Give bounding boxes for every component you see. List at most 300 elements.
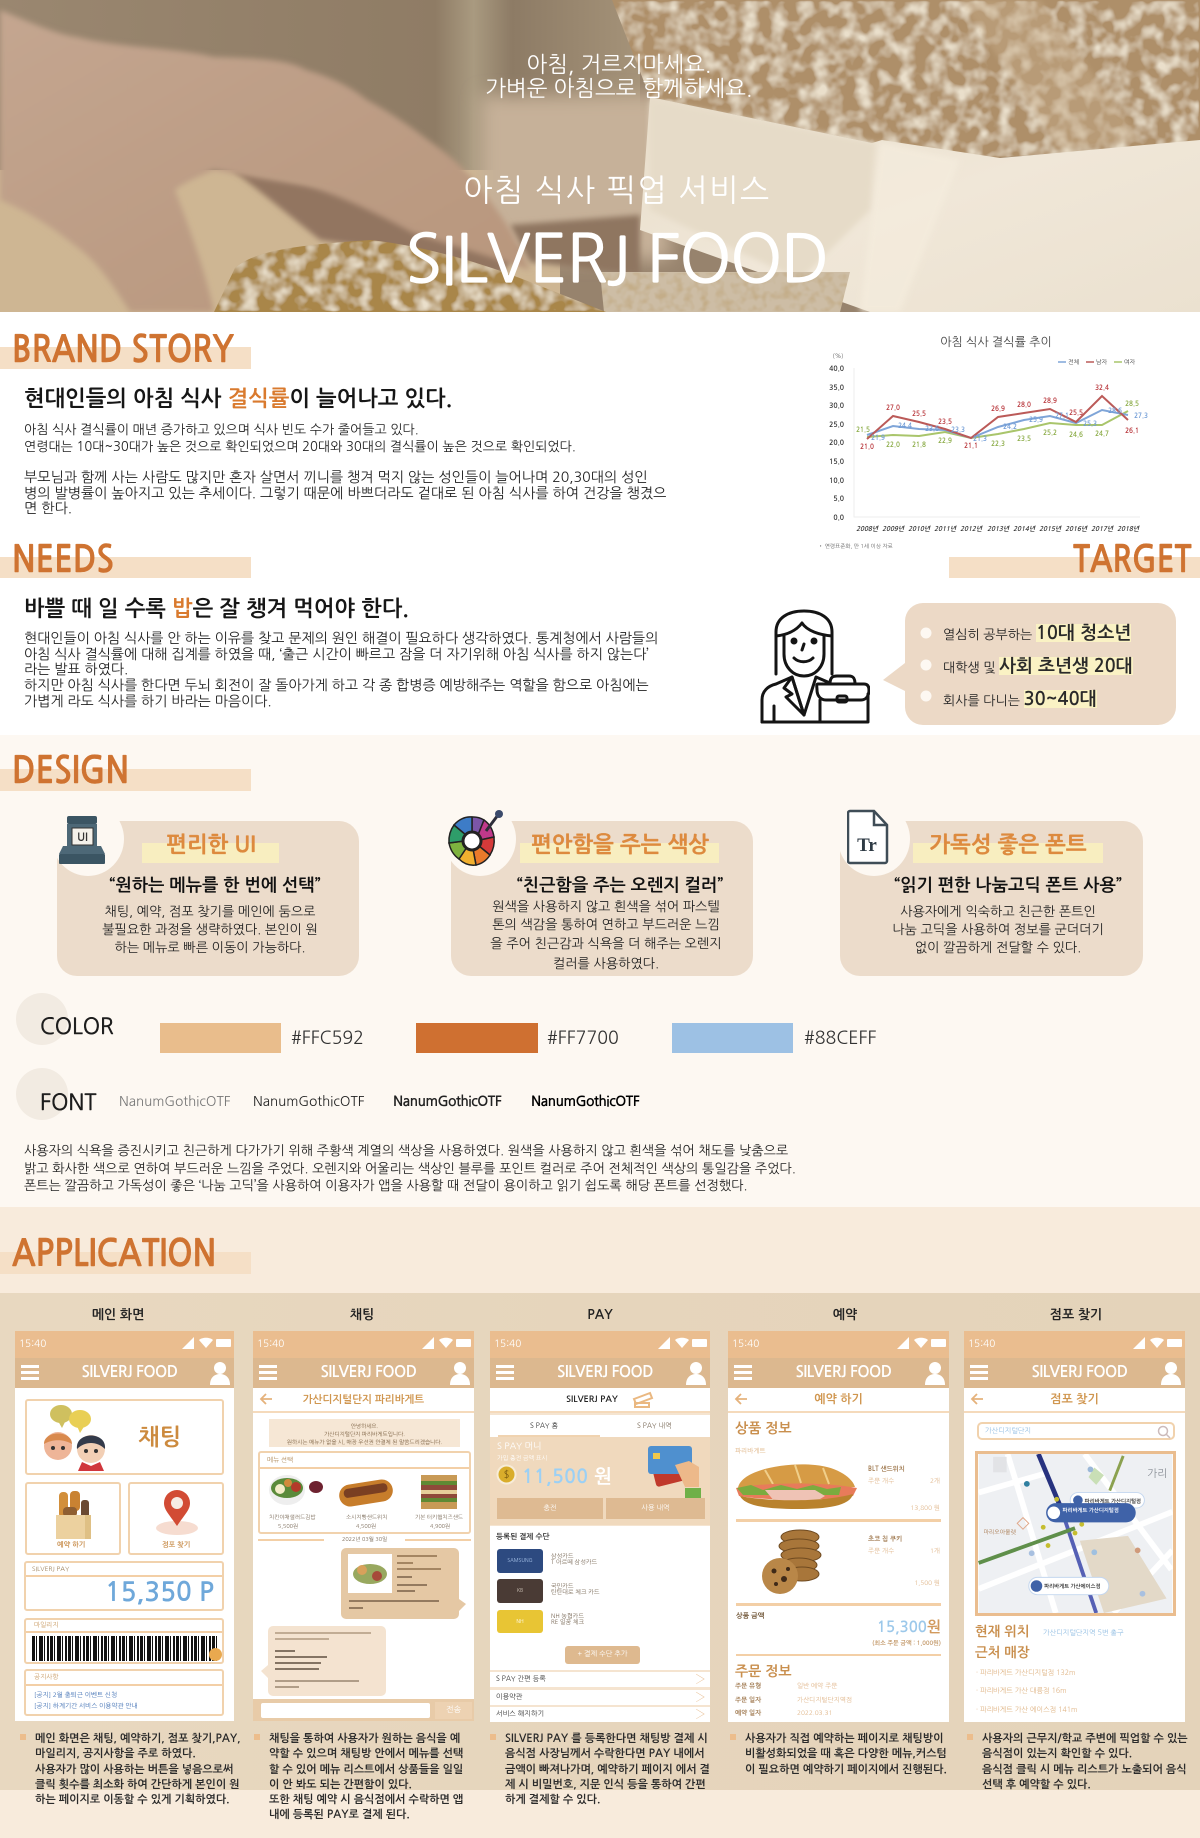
- illustration: chat people: [44, 1405, 106, 1471]
- reservation header: [728, 1388, 949, 1413]
- caption: pay: 하게 결제할 수 있다.: [505, 1794, 600, 1805]
- order info rows: 주문 일자: [735, 1697, 761, 1703]
- nearby stores: · 파리바게트 가산 에이스점 141m: [976, 1707, 1077, 1714]
- caption: chat: 약할 수 있으며 채팅방 안에서 메뉴를 선택: [269, 1748, 463, 1759]
- card description: 나눔 고딕을 사용하여 정보를 군더더기: [892, 923, 1104, 936]
- target item: teens: 열심히 공부하는 10대 청소년: [943, 624, 1131, 642]
- chart: breakfast skip rate trend: 23.6: [925, 426, 939, 432]
- screen label: reservation: 예약: [833, 1308, 857, 1321]
- chat notice: 안녕하세요.: [351, 1423, 378, 1429]
- card description: 톤의 색감을 통하여 연하고 부드러운 느낌: [492, 918, 720, 931]
- caption: pay: SILVERJ PAY 를 등록한다면 채팅방 결제 시: [505, 1733, 708, 1744]
- pay tabs: S PAY 내역: [637, 1423, 672, 1430]
- card description: 채팅, 예약, 점포 찾기를 메인에 둠으로: [105, 905, 315, 918]
- payment methods title: 등록된 결제 수단: [496, 1534, 550, 1541]
- font sample: regular: NanumGothicOTF: [253, 1095, 364, 1108]
- chart: breakfast skip rate trend: 21.8: [912, 442, 926, 448]
- food: sub sandwich: [735, 1462, 858, 1510]
- card corner circle: [52, 802, 124, 876]
- caption: pay: 제 시 비밀번호, 지문 인식 등을 통하여 간편: [505, 1779, 706, 1790]
- app nav bar: [964, 1358, 1185, 1388]
- pay balance: 11,500 원: [522, 1467, 613, 1486]
- brand story second paragraph: [24, 470, 666, 516]
- needs subheading: 바쁠 때 일 수록 밥은 잘 챙겨 먹어야 한다.: [24, 599, 409, 620]
- card description: 원색을 사용하지 않고 흰색을 섞어 파스텔: [492, 900, 720, 913]
- chart: breakfast skip rate trend: 40.0: [829, 366, 844, 373]
- swatch label: #FF7700: [547, 1029, 619, 1047]
- chart: breakfast skip rate trend: 0.0: [833, 515, 844, 522]
- swatch label: #88CEFF: [804, 1029, 876, 1047]
- chat input bar: [253, 1699, 474, 1721]
- chart: breakfast skip rate trend: 남자: [1096, 359, 1108, 365]
- divider: [736, 1654, 941, 1656]
- chart: breakfast skip rate trend: 23.5: [938, 419, 952, 425]
- chart: breakfast skip rate trend: 전체: [1068, 359, 1080, 365]
- brand story second paragraph: 병의 발병률이 높아지고 있는 추세이다. 그렇기 때문에 바쁘더라도 겉대로 된 아침 식사를 하여 건강을 챙겼으: [24, 486, 666, 500]
- chat input bar: 전송: [446, 1706, 461, 1714]
- product total: (최소 주문 금액 : 1,000원): [872, 1640, 941, 1646]
- menu list: 4,500원: [356, 1523, 376, 1529]
- card background: [57, 821, 359, 976]
- screen label: chat: 채팅: [350, 1308, 374, 1321]
- menu list: 4,900원: [430, 1523, 450, 1529]
- section: design: [0, 735, 1200, 1207]
- store finder header: [964, 1388, 1185, 1413]
- caption: main: 마일리지, 공지사항을 주로 하였다.: [35, 1748, 196, 1759]
- chart: breakfast skip rate trend: 21.0: [860, 444, 874, 450]
- needs body text: 하지만 아침 식사를 한다면 두뇌 회전이 잘 돌아가게 하고 각 종 합병증 예방해주는 역할을 함으로 아침에는: [24, 679, 649, 693]
- item detail: cookies: 1,500 원: [914, 1579, 940, 1586]
- app nav bar: [15, 1358, 234, 1388]
- chat header: 가산디지털단지 파리바게트: [303, 1394, 424, 1405]
- card description: [892, 905, 1104, 954]
- chart: breakfast skip rate trend: • 연령표준화, 만 1세 이상 자료: [818, 543, 893, 549]
- chart: breakfast skip rate trend: 25.5: [1069, 410, 1083, 416]
- item detail: cookies: 주문 개수: [868, 1547, 894, 1554]
- icon: font file: [847, 810, 888, 864]
- chart: breakfast skip rate trend: 27.3: [1134, 413, 1148, 419]
- icon: font file: Tr: [857, 835, 877, 856]
- order info rows: 2022.03.31: [797, 1709, 832, 1716]
- chart: breakfast skip rate trend: 21.9: [871, 435, 885, 441]
- caption bullet: [967, 1734, 973, 1740]
- caption bullet: [490, 1734, 496, 1740]
- chart: breakfast skip rate trend: [818, 336, 1148, 549]
- chat bubble: order: [341, 1548, 466, 1619]
- card: samsung: SAMSUNG: [507, 1558, 533, 1563]
- font sample: light: NanumGothicOTF: [119, 1095, 230, 1108]
- target item: thirties and forties: 회사를 다니는 30~40대: [943, 690, 1097, 708]
- chart: breakfast skip rate trend: 24.7: [1095, 431, 1109, 437]
- card description: 사용자에게 익숙하고 친근한 폰트인: [900, 905, 1096, 918]
- chart: breakfast skip rate trend: 2015년: [1039, 525, 1062, 532]
- map: 파리바게트 가산디지털점: [1085, 1498, 1141, 1504]
- food: hotdog: [339, 1480, 393, 1506]
- row: terms: ›: [695, 1691, 706, 1703]
- icon: woman with briefcase: [760, 610, 870, 724]
- phone: main screen: [15, 1331, 234, 1721]
- app nav bar: SILVERJ FOOD: [795, 1365, 892, 1380]
- food: cookies: [762, 1529, 822, 1595]
- card title highlight: [913, 843, 1103, 863]
- caption: chat: 채팅을 통하여 사용자가 원하는 음식을 예: [269, 1733, 460, 1744]
- chart: breakfast skip rate trend: 2017년: [1091, 525, 1114, 532]
- design rationale text: [24, 1144, 796, 1192]
- chart: breakfast skip rate trend: 2016년: [1065, 525, 1088, 532]
- caption bullet: [730, 1734, 736, 1740]
- map: 가리: [1147, 1468, 1167, 1479]
- chart: breakfast skip rate trend: 22.3: [991, 441, 1005, 447]
- status bar: [253, 1331, 474, 1358]
- item detail: sandwich: BLT 샌드위치: [868, 1466, 905, 1472]
- icon: coin: [496, 1464, 516, 1484]
- swatch: blue: [672, 1023, 793, 1053]
- nearby stores: [975, 1647, 1180, 1719]
- brand story second paragraph: 부모님과 함께 사는 사람도 많지만 혼자 살면서 끼니를 챙겨 먹지 않는 성인들이 늘어나며 20,30대의 성인: [24, 471, 648, 485]
- font sample: bold: NanumGothicOTF: [393, 1095, 501, 1109]
- status bar: 15:40: [494, 1339, 521, 1349]
- chart: breakfast skip rate trend: 25.0: [829, 422, 844, 429]
- brand story body text: [24, 423, 576, 452]
- card quote: “원하는 메뉴를 한 번에 선택”: [109, 876, 321, 894]
- menu list: 5,500원: [278, 1523, 298, 1529]
- phone: reservation screen: [728, 1331, 949, 1722]
- payment methods: NH 농협카드: [551, 1613, 584, 1619]
- chart: breakfast skip rate trend: 30.0: [829, 403, 844, 410]
- caption: main: 클릭 횟수를 최소화 하여 간단하게 본인이 원: [35, 1779, 240, 1790]
- chart: breakfast skip rate trend: 2014년: [1013, 525, 1036, 532]
- card quote: “친근함을 주는 오렌지 컬러”: [517, 876, 723, 894]
- caption: reservation: 사용자가 직접 예약하는 페이지로 채팅방이: [745, 1733, 943, 1744]
- icon: coin: $: [503, 1469, 510, 1480]
- payment methods: [490, 1526, 710, 1670]
- card corner circle: [444, 802, 516, 876]
- section: brand story: [0, 331, 666, 516]
- row: service withdrawal: 서비스 해지하기: [496, 1711, 544, 1718]
- payment methods: T 아르떼 삼성카드: [551, 1559, 597, 1565]
- card description: 을 주어 친근감과 식욕을 더 해주는 오렌지: [490, 937, 722, 950]
- current location: 가산디지털단지역 5번 출구: [1043, 1630, 1124, 1637]
- chart: breakfast skip rate trend: 28.5: [1125, 401, 1139, 407]
- icon: bread bag: [56, 1491, 91, 1539]
- row: simple auth: [490, 1672, 710, 1687]
- target heading bar: [949, 557, 1200, 578]
- icon: map pin: [156, 1490, 198, 1535]
- food: sandwich: [421, 1475, 457, 1509]
- caption bullet: [254, 1734, 260, 1740]
- target heading: TARGET: [1073, 541, 1191, 578]
- caption: pay: 금액이 빠져나가며, 예약하기 페이지 에서 결: [505, 1764, 710, 1775]
- icon: UI register: [59, 816, 105, 864]
- status bar: [964, 1331, 1185, 1358]
- button: charge: 충전: [543, 1505, 557, 1512]
- app nav bar: SILVERJ FOOD: [557, 1365, 653, 1380]
- menu list: 기본 터키햄치즈샌드: [415, 1514, 463, 1520]
- chart: breakfast skip rate trend: 23.5: [1017, 436, 1031, 442]
- chart: breakfast skip rate trend: 22.0: [886, 442, 900, 448]
- chart: breakfast skip rate trend: 24.4: [898, 423, 912, 429]
- product total: 상품 금액: [736, 1613, 764, 1620]
- design heading: DESIGN: [12, 752, 129, 789]
- row: simple auth: S PAY 간편 등록: [496, 1676, 546, 1683]
- reservation label: 예약 하기: [57, 1542, 85, 1549]
- card title highlight: [142, 843, 279, 863]
- order info title: 주문 정보: [735, 1665, 792, 1679]
- needs body text: [24, 631, 658, 709]
- chart: breakfast skip rate trend: 21.3: [973, 436, 987, 442]
- design rationale text: 사용자의 식욕을 증진시키고 친근하게 다가가기 위해 주황색 계열의 색상을 사용하였다. 원색을 사용하지 않고 흰색을 섞어 채도를 낮춤으로: [24, 1144, 788, 1157]
- chart: breakfast skip rate trend: 26.1: [1125, 428, 1139, 434]
- caption: reservation: 비활성화되었을 때 혹은 다양한 메뉴,커스텀: [745, 1748, 947, 1759]
- illustration: card in hand: [647, 1445, 701, 1498]
- caption: store finder: 음식점 클릭 시 메뉴 리스트가 노출되어 음식: [982, 1764, 1187, 1775]
- pay balance tile: [24, 1561, 224, 1611]
- chat header: [253, 1388, 474, 1413]
- card: samsung: [497, 1549, 543, 1573]
- order info rows: 주문 유형: [735, 1683, 761, 1689]
- chat label: 채팅: [138, 1427, 181, 1449]
- store finder tile: [128, 1482, 224, 1555]
- chat notice: [269, 1419, 460, 1447]
- card description: [490, 900, 722, 970]
- chat tile: [25, 1399, 224, 1475]
- card: kb: [497, 1579, 543, 1603]
- needs body text: 라는 발표 하였다.: [24, 663, 128, 677]
- application heading: APPLICATION: [12, 1235, 216, 1272]
- map: 파리바게트 가산에이스점: [1044, 1583, 1100, 1589]
- section: target: [760, 541, 1200, 725]
- needs body text: 현대인들이 아침 식사를 안 하는 이유를 찾고 문제의 원인 해결이 필요하다 생각하였다. 통계청에서 사람들의: [24, 632, 658, 646]
- phone: chat screen: [253, 1331, 474, 1721]
- caption: chat: [269, 1732, 463, 1820]
- app nav bar: SILVERJ FOOD: [1031, 1365, 1128, 1380]
- chart: breakfast skip rate trend: 25.9: [1029, 417, 1043, 423]
- caption: chat: 이 안 봐도 되는 간편함이 있다.: [269, 1779, 412, 1790]
- section: needs: [0, 541, 658, 709]
- icon: color palette: [448, 810, 503, 866]
- color label circle: [16, 993, 68, 1045]
- card background: [840, 821, 1143, 976]
- swatch: orange: [416, 1023, 538, 1053]
- button: history: 사용 내역: [641, 1505, 670, 1512]
- caption bullet: [20, 1734, 26, 1740]
- balance: 15,350 P: [105, 1579, 214, 1605]
- caption: main: 하는 페이지로 이동할 수 있게 기획하였다.: [35, 1794, 230, 1805]
- reservation tile: [25, 1482, 121, 1555]
- caption: reservation: 이 필요하면 예약하기 페이지에서 진행된다.: [745, 1764, 947, 1775]
- screen label: main: 메인 화면: [92, 1308, 144, 1321]
- menu list: 치킨야채샐러드김밥: [269, 1514, 316, 1520]
- color row: [16, 993, 876, 1053]
- card description: [102, 905, 318, 954]
- font row: [16, 1068, 640, 1120]
- screen label: pay: PAY: [587, 1308, 613, 1321]
- button: add payment: + 결제 수단 추가: [578, 1651, 627, 1658]
- food: salad bowl: [269, 1475, 323, 1505]
- chart: breakfast skip rate trend: 15.0: [829, 459, 844, 466]
- pay balance panel: [490, 1437, 710, 1525]
- app nav bar: [253, 1358, 474, 1388]
- font label: FONT: [40, 1092, 96, 1114]
- row: terms: [490, 1690, 710, 1705]
- item detail: sandwich: 2개: [930, 1477, 940, 1484]
- caption: main: 사용자가 많이 사용하는 버튼을 넣음으로써: [35, 1764, 233, 1775]
- chart: breakfast skip rate trend: 25.3: [1083, 421, 1097, 427]
- card title: 가독성 좋은 폰트: [929, 834, 1087, 856]
- app nav bar: SILVERJ FOOD: [320, 1365, 417, 1380]
- store finder label: 점포 찾기: [162, 1542, 190, 1549]
- card background: [451, 821, 753, 976]
- chat notice: 원하시는 메뉴가 없을 시, 매장 우선권 안결제 된 말씀드리겠습니다.: [287, 1439, 442, 1445]
- brand story second paragraph: 면 한다.: [24, 502, 72, 516]
- swatch: light orange: [160, 1023, 281, 1053]
- font sample: extra bold: NanumGothicOTF: [531, 1095, 639, 1109]
- chart: breakfast skip rate trend: 28.6: [1108, 408, 1122, 414]
- needs body text: 아침 식사 결식률에 대해 집계를 하였을 때, ‘출근 시간이 빠르고 잠을 더 자기위해 아침 식사를 하지 않는다’: [24, 648, 649, 662]
- app nav bar: [728, 1358, 949, 1388]
- caption: pay: 음식점 사장님께서 수락한다면 PAY 내에서: [505, 1748, 704, 1759]
- menu list: [258, 1451, 471, 1534]
- item detail: sandwich: [868, 1466, 940, 1514]
- chart: breakfast skip rate trend: 5.0: [833, 496, 844, 503]
- payment methods: RE 일꿈 체크: [551, 1619, 584, 1625]
- row: terms: 이용약관: [496, 1694, 522, 1701]
- reservation header: 예약 하기: [814, 1393, 863, 1405]
- chart: breakfast skip rate trend: 35.0: [829, 385, 844, 392]
- menu list: 소시지빵샌드위치: [346, 1514, 387, 1520]
- pay money label: S PAY 머니: [497, 1442, 542, 1451]
- divider: [736, 1603, 941, 1606]
- map: [975, 1451, 1176, 1616]
- design card: convenient UI: [57, 816, 359, 976]
- target audience bubble: [883, 603, 1176, 725]
- tagline: [485, 54, 753, 100]
- status bar: 15:40: [257, 1339, 284, 1349]
- caption: store finder: 선택 후 예약할 수 있다.: [982, 1779, 1091, 1790]
- font label circle: [16, 1068, 68, 1120]
- card: nh: [497, 1610, 543, 1633]
- notice tile: [24, 1669, 224, 1716]
- brand story body text: 연령대는 10대~30대가 높은 것으로 확인되었으며 20대와 30대의 결식률이 높은 것으로 확인되었다.: [24, 440, 576, 452]
- tagline: 아침, 거르지마세요.: [527, 54, 711, 76]
- status bar: 15:40: [732, 1339, 759, 1349]
- brand story heading: BRAND STORY: [12, 331, 234, 368]
- needs heading bar: [0, 557, 251, 578]
- product total: 15,300원: [877, 1620, 941, 1635]
- barcode tile: [24, 1618, 224, 1664]
- order info rows: 가산디지털단지역점: [797, 1696, 852, 1703]
- current location: [975, 1625, 1180, 1641]
- design card: readable font: [840, 810, 1143, 976]
- hero photo banner: [0, 0, 1200, 312]
- pay tabs: S PAY 홈: [530, 1423, 558, 1430]
- chart: breakfast skip rate trend: 23.3: [951, 427, 965, 433]
- card: kb: KB: [517, 1588, 523, 1593]
- application panel background: [0, 1293, 1200, 1790]
- chart: breakfast skip rate trend: 2012년: [960, 525, 983, 532]
- needs body text: 가볍게 라도 식사를 하기 바라는 마음이다.: [24, 695, 272, 709]
- menu list: 메뉴 선택: [267, 1456, 293, 1463]
- button: history: [606, 1498, 705, 1519]
- date divider: 2022년 03월 30일: [342, 1536, 387, 1542]
- chart: breakfast skip rate trend: (%): [833, 353, 843, 359]
- card description: 없이 깔끔하게 전달할 수 있다.: [915, 941, 1081, 954]
- service subtitle: 아침 식사 픽업 서비스: [463, 175, 771, 206]
- chart: breakfast skip rate trend: 2009년: [882, 525, 905, 532]
- chart: breakfast skip rate trend: 21.1: [964, 443, 978, 449]
- chart: breakfast skip rate trend: 20.0: [829, 440, 844, 447]
- chart: breakfast skip rate trend: 여자: [1124, 359, 1136, 365]
- phone: pay screen: [490, 1331, 710, 1722]
- map: 마리오아울렛: [983, 1529, 1017, 1535]
- nearby stores: · 파리바게트 가산 대륭점 16m: [976, 1688, 1067, 1695]
- map: 파리바게트 가산디지털점: [1062, 1507, 1119, 1513]
- chart: breakfast skip rate trend: 10.0: [829, 478, 844, 485]
- store finder header: 점포 찾기: [1050, 1393, 1099, 1405]
- item detail: cookies: 1개: [930, 1547, 940, 1554]
- chart: breakfast skip rate trend: 28.9: [1043, 398, 1057, 404]
- brand title: SILVERJ FOOD: [406, 226, 828, 292]
- barcode: [32, 1636, 217, 1661]
- chart: breakfast skip rate trend: 25.2: [1043, 430, 1057, 436]
- design heading bar: [0, 769, 251, 791]
- caption: reservation: [745, 1731, 947, 1777]
- order info rows: 일반 예약 주문: [797, 1682, 837, 1689]
- order info rows: 예약 일자: [735, 1710, 761, 1716]
- barcode tile: 마일리지: [34, 1621, 58, 1628]
- brand story subheading: 현대인들의 아침 식사 결식률이 늘어나고 있다.: [24, 389, 452, 410]
- order info rows: [735, 1683, 935, 1721]
- app nav bar: SILVERJ FOOD: [81, 1365, 178, 1380]
- card: nh: NH: [516, 1619, 524, 1624]
- card title: 편리한 UI: [166, 834, 256, 856]
- chart: breakfast skip rate trend: 2010년: [908, 525, 931, 532]
- status bar: 15:40: [19, 1339, 46, 1349]
- design rationale text: 폰트는 깔끔하고 가독성이 좋은 ‘나눔 고딕’을 사용하여 이용자가 앱을 사용할 때 전달이 용이하고 읽기 쉽도록 해당 폰트를 선정했다.: [24, 1179, 747, 1192]
- item detail: sandwich: 주문 개수: [868, 1477, 894, 1484]
- section: application header band: [0, 1207, 1200, 1838]
- chart: breakfast skip rate trend: 25.5: [912, 411, 926, 417]
- chat notice: 가산디지털단지 파리바게트입니다.: [324, 1431, 405, 1437]
- caption: chat: 또한 채팅 예약 시 음식점에서 수락하면 앱: [269, 1794, 463, 1805]
- icon: UI register: UI: [77, 832, 88, 843]
- card corner circle: [838, 802, 910, 876]
- divider: [736, 1519, 941, 1522]
- nearby stores: 근처 매장: [975, 1647, 1030, 1660]
- row: service withdrawal: [490, 1707, 710, 1722]
- chart: breakfast skip rate trend: 2013년: [987, 525, 1010, 532]
- barcode button: [209, 1648, 222, 1661]
- chat bubble: reply: [261, 1626, 386, 1696]
- brand story heading bar: [0, 347, 251, 369]
- chart: breakfast skip rate trend: 21.5: [856, 427, 870, 433]
- status bar: [15, 1331, 234, 1358]
- chart: breakfast skip rate trend: 22.9: [938, 438, 952, 444]
- payment methods: 탄탄대로 체크 카드: [551, 1589, 599, 1595]
- card title: 편안함을 주는 색상: [531, 834, 709, 856]
- chart: breakfast skip rate trend: 2018년: [1117, 525, 1140, 532]
- product total: [728, 1610, 949, 1650]
- design card: comfortable colors: [448, 810, 753, 976]
- chart: breakfast skip rate trend: 2008년: [856, 525, 879, 532]
- caption: store finder: 음식점이 있는지 확인할 수 있다.: [982, 1748, 1132, 1759]
- chart: breakfast skip rate trend: 2011년: [934, 525, 957, 532]
- caption: chat: 내에 등록된 PAY로 결제 된다.: [269, 1809, 410, 1820]
- current location: 현재 위치: [975, 1626, 1030, 1639]
- chart: breakfast skip rate trend: 27.0: [886, 405, 900, 411]
- nearby stores: · 파리바게트 가산디지털점 132m: [976, 1670, 1075, 1677]
- payment methods: 국민카드: [551, 1583, 574, 1589]
